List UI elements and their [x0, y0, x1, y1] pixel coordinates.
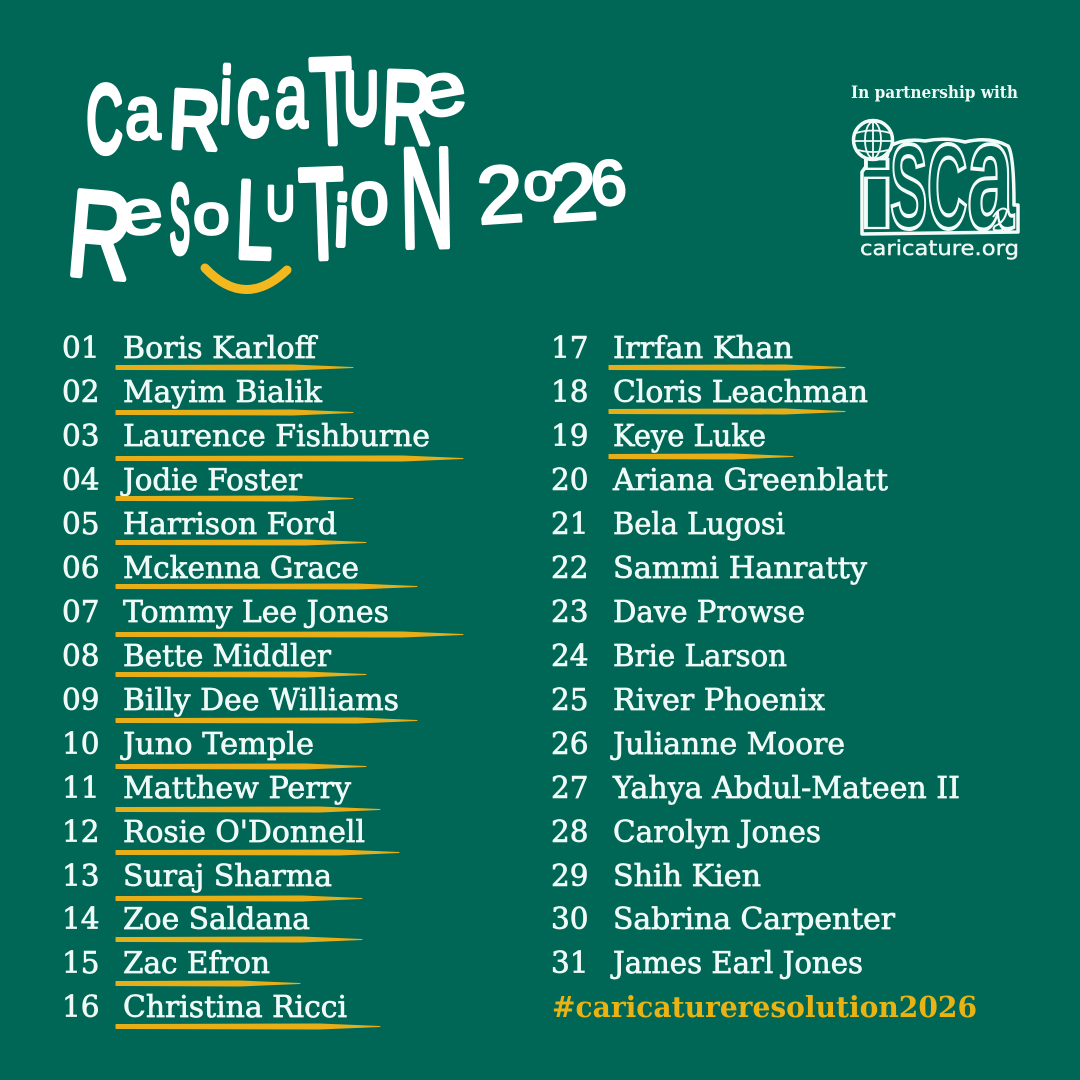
entry 17	[551, 331, 845, 370]
entry 11: 11	[62, 771, 100, 805]
entry 07	[62, 595, 463, 637]
entry 18: Cloris Leachman	[613, 375, 868, 409]
title: Caricature Resolution 2026: L	[234, 159, 275, 283]
title: Caricature Resolution 2026: T	[297, 142, 347, 287]
entry 02	[62, 375, 353, 415]
entry 06: 06	[62, 551, 100, 585]
entry 15: Zac Efron	[123, 946, 270, 980]
entry 05	[62, 507, 366, 545]
entry 26: 26	[551, 727, 589, 761]
entry 03: Laurence Fishburne	[123, 419, 430, 453]
entry 01: Boris Karloff	[123, 331, 318, 365]
logo caption: caricature.org: caricature.org	[860, 236, 1019, 260]
title: Caricature Resolution 2026: 0	[524, 163, 556, 209]
entry 20: 20	[551, 463, 589, 497]
entry 11: Matthew Perry	[123, 771, 351, 805]
entry 24: Brie Larson	[613, 639, 787, 673]
entry 23: Dave Prowse	[613, 595, 805, 629]
title: Caricature Resolution 2026: s	[170, 140, 190, 279]
entry 16: 16	[62, 990, 100, 1024]
title: Caricature Resolution 2026: U	[344, 59, 379, 141]
entry 31: James Earl Jones	[610, 946, 863, 980]
entry 15	[62, 946, 300, 986]
entry 08: Bette Middler	[123, 639, 332, 673]
entry 11	[62, 771, 380, 812]
entry 10: Juno Temple	[120, 727, 314, 761]
title: Caricature Resolution 2026: T	[308, 33, 355, 171]
title: Caricature Resolution 2026: 6	[588, 147, 629, 220]
title: Caricature Resolution 2026: o	[193, 183, 230, 247]
smile under title	[205, 268, 287, 290]
entry 06	[62, 551, 417, 589]
entry 08: 08	[62, 639, 100, 673]
entry 05: 05	[62, 507, 100, 541]
ISCA logo: a	[967, 87, 1015, 262]
entry 30: Sabrina Carpenter	[613, 902, 896, 936]
entry 18	[551, 375, 868, 414]
entry 07: 07	[62, 595, 100, 629]
entry 21: Bela Lugosi	[613, 507, 785, 541]
entry 03	[62, 419, 463, 461]
entry 04	[62, 463, 353, 501]
entry 25: River Phoenix	[613, 683, 825, 717]
entry 22: Sammi Hanratty	[613, 551, 867, 585]
entry 24: 24	[551, 639, 589, 673]
title: Caricature Resolution 2026: U	[266, 177, 295, 231]
entry 01: 01	[62, 331, 100, 365]
entry 09: Billy Dee Williams	[123, 683, 399, 717]
title: Caricature Resolution 2026: C	[86, 67, 123, 173]
entry 12: 12	[62, 815, 100, 849]
entry 13: Suraj Sharma	[123, 859, 332, 893]
title: Caricature Resolution 2026: a	[125, 70, 161, 155]
entry 27: 27	[551, 771, 589, 805]
entry 05: Harrison Ford	[123, 507, 337, 541]
entry 27: Yahya Abdul-Mateen II	[612, 771, 960, 805]
title: Caricature Resolution 2026: i	[219, 52, 233, 139]
entry 10	[62, 727, 366, 769]
entry 29: Shih Kien	[613, 859, 761, 893]
title: Caricature Resolution 2026: R	[380, 48, 435, 166]
entry 15: 15	[62, 946, 100, 980]
entry 04: Jodie Foster	[120, 463, 303, 497]
title: Caricature Resolution 2026: N	[399, 118, 455, 277]
ISCA logo: S	[890, 119, 927, 254]
entry 19: 19	[551, 419, 589, 453]
entry 31: 31	[551, 946, 589, 980]
entry 28: Carolyn Jones	[613, 815, 821, 849]
list column: 01 to 16	[62, 331, 463, 1029]
entry 21: 21	[551, 507, 589, 541]
title: Caricature Resolution 2026: a	[274, 46, 308, 147]
ISCA logo: i	[855, 143, 899, 248]
entry 13: 13	[62, 859, 100, 893]
entry 01	[62, 331, 353, 370]
entry 20: Ariana Greenblatt	[612, 463, 888, 497]
entry 22: 22	[551, 551, 589, 585]
list column: 17 to 31	[551, 331, 960, 980]
hashtag: #caricatureresolution2026	[552, 990, 977, 1024]
title: Caricature Resolution 2026: c	[237, 44, 269, 156]
title: Caricature Resolution 2026: e	[115, 175, 166, 250]
entry 16: Christina Ricci	[123, 990, 347, 1024]
entry 03: 03	[62, 419, 100, 453]
title: Caricature Resolution 2026: o	[350, 156, 389, 241]
entry 29	[551, 859, 761, 893]
entry 12: Rosie O'Donnell	[123, 815, 365, 849]
title: Caricature Resolution 2026: 2	[546, 146, 600, 239]
entry 19: Keye Luke	[613, 419, 766, 453]
entry 14: 14	[62, 902, 100, 936]
entry 19	[551, 419, 793, 459]
entry 17: 17	[551, 331, 589, 365]
ISCA logo: C	[927, 119, 967, 254]
entry 12	[62, 815, 399, 855]
entry 18: 18	[551, 375, 589, 409]
title: Caricature Resolution 2026	[63, 33, 629, 306]
entry 17: Irrfan Khan	[613, 331, 793, 365]
entry 26: Julianne Moore	[610, 727, 845, 761]
entry 23: 23	[551, 595, 589, 629]
entry 25: 25	[551, 683, 589, 717]
entry 04: 04	[62, 463, 100, 497]
entry 28: 28	[551, 815, 589, 849]
title: Caricature Resolution 2026: i	[333, 180, 350, 261]
entry 30: 30	[551, 902, 589, 936]
ISCA logo	[854, 87, 1018, 262]
title: Caricature Resolution 2026: R	[167, 74, 222, 168]
entry 10: 10	[62, 727, 100, 761]
title: Caricature Resolution 2026: R	[63, 164, 138, 306]
entry 13	[62, 859, 362, 901]
title: Caricature Resolution 2026: e	[410, 44, 473, 135]
entry 07: Tommy Lee Jones	[123, 595, 389, 629]
entry 29: 29	[551, 859, 589, 893]
entry 09: 09	[62, 683, 100, 717]
entry 14: Zoe Saldana	[123, 902, 310, 936]
entry 02: Mayim Bialik	[123, 375, 323, 409]
entry 16	[62, 990, 380, 1029]
entry 08	[62, 639, 366, 677]
partnership label: In partnership with	[851, 83, 1018, 103]
entry 09	[62, 683, 417, 723]
title: Caricature Resolution 2026: 2	[474, 149, 526, 242]
entry 06: Mckenna Grace	[123, 551, 359, 585]
entry 14	[62, 902, 362, 942]
entry 02: 02	[62, 375, 100, 409]
